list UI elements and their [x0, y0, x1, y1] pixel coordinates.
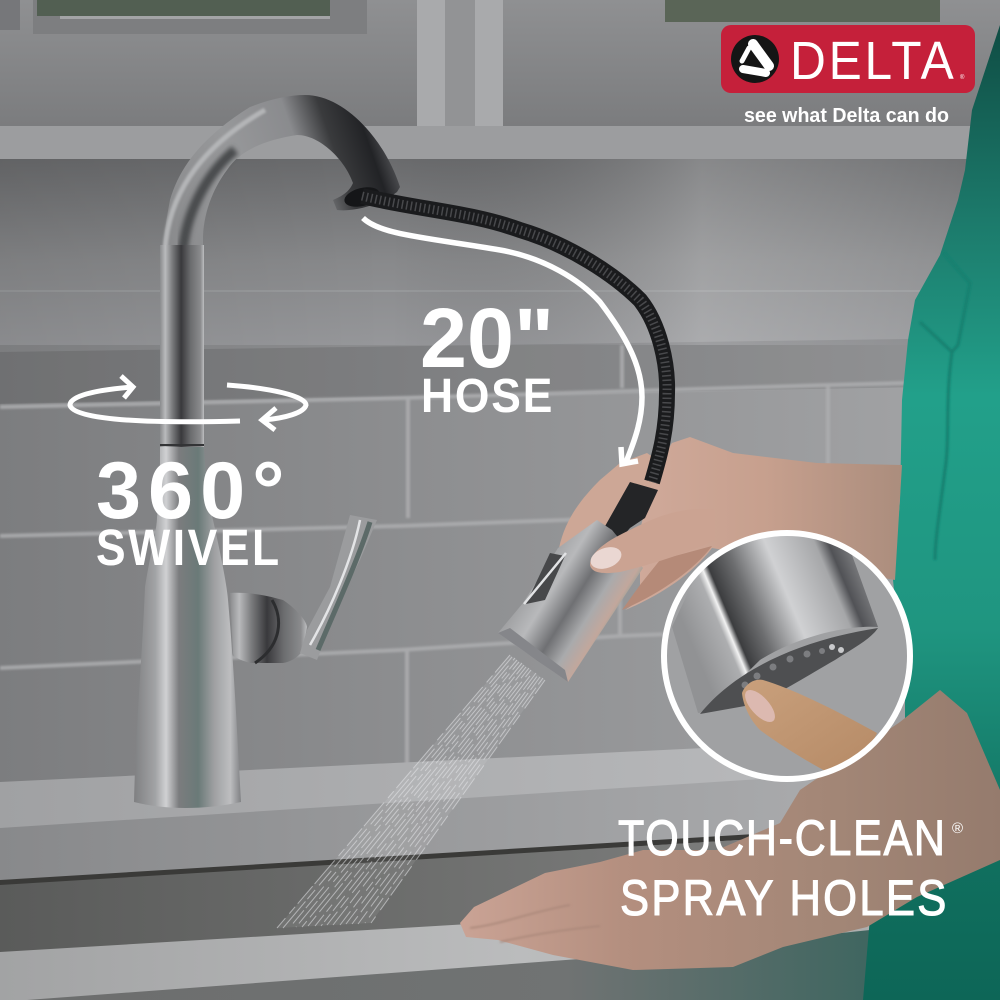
label: 20 inch hose: HOSE: [421, 368, 554, 422]
spray wand head: [498, 520, 643, 682]
front counter edge: [0, 930, 870, 1000]
shirt pocket folds: [920, 252, 970, 560]
faucet: [134, 95, 400, 808]
logo wordmark: DELTA: [790, 30, 957, 90]
shirt: [863, 25, 1000, 1000]
handle hub: [230, 593, 307, 663]
logo badge: [721, 25, 975, 93]
label: touch-clean spray holes: [618, 810, 963, 926]
hand holding spray wand: [559, 437, 902, 610]
faucet spout arc: [160, 95, 400, 360]
hose braid: [362, 196, 667, 482]
label: 20 inch hose: 20": [420, 291, 554, 385]
front counter surface: [0, 900, 870, 1000]
faucet column: [160, 245, 204, 447]
logo: Delta: ®: [960, 74, 965, 81]
hose arrow: [363, 218, 642, 464]
counter front edge: [0, 772, 870, 882]
handle lever: [300, 515, 377, 660]
finger creases: [470, 905, 600, 942]
thumb nail: [588, 543, 624, 573]
window frame: [0, 0, 1000, 126]
sink basin: [0, 832, 870, 953]
spout opening: [342, 184, 382, 210]
label: 360 degree swivel: SWIVEL: [96, 520, 282, 577]
tagline: see what Delta can do: [744, 105, 949, 127]
label: 360 degree swivel: 360°: [96, 446, 292, 536]
back of hand and wrist: [625, 437, 902, 610]
label: touch-clean spray holes: TOUCH-CLEAN: [618, 810, 947, 866]
logo mark: [731, 35, 779, 83]
water spray: [277, 655, 545, 928]
spray head connector: [604, 482, 658, 542]
label: 360 degree swivel: [96, 446, 292, 577]
lower forearm and resting hand: [460, 690, 1000, 970]
callout disc: [664, 533, 910, 779]
index finger: [559, 453, 660, 552]
swivel joint: [160, 444, 204, 446]
tile field: [0, 345, 975, 785]
callout ring: [664, 533, 910, 779]
detail callout: spray holes: [664, 530, 910, 779]
label: touch-clean spray holes: SPRAY HOLES: [620, 870, 949, 926]
window ledge: [0, 126, 975, 159]
wall above the tiles: [0, 159, 975, 345]
palm shadow: [622, 546, 712, 610]
spray button: [526, 553, 565, 604]
bottom lip shade: [498, 628, 568, 682]
spout highlights: [165, 110, 265, 250]
grout lines: [0, 345, 905, 765]
counter top: [0, 740, 870, 830]
logo: Delta: [721, 25, 975, 93]
finger nail: [745, 690, 775, 722]
hose: [362, 196, 667, 482]
spray face and holes: [700, 628, 878, 714]
basin shadow line: [0, 830, 820, 886]
thumb: [588, 509, 715, 573]
label: touch-clean spray holes: ®: [952, 820, 963, 837]
pressing finger: [742, 680, 877, 772]
faucet base: [134, 447, 241, 808]
swivel arrow: [70, 376, 306, 430]
enlarged spray head metal: [672, 530, 878, 713]
